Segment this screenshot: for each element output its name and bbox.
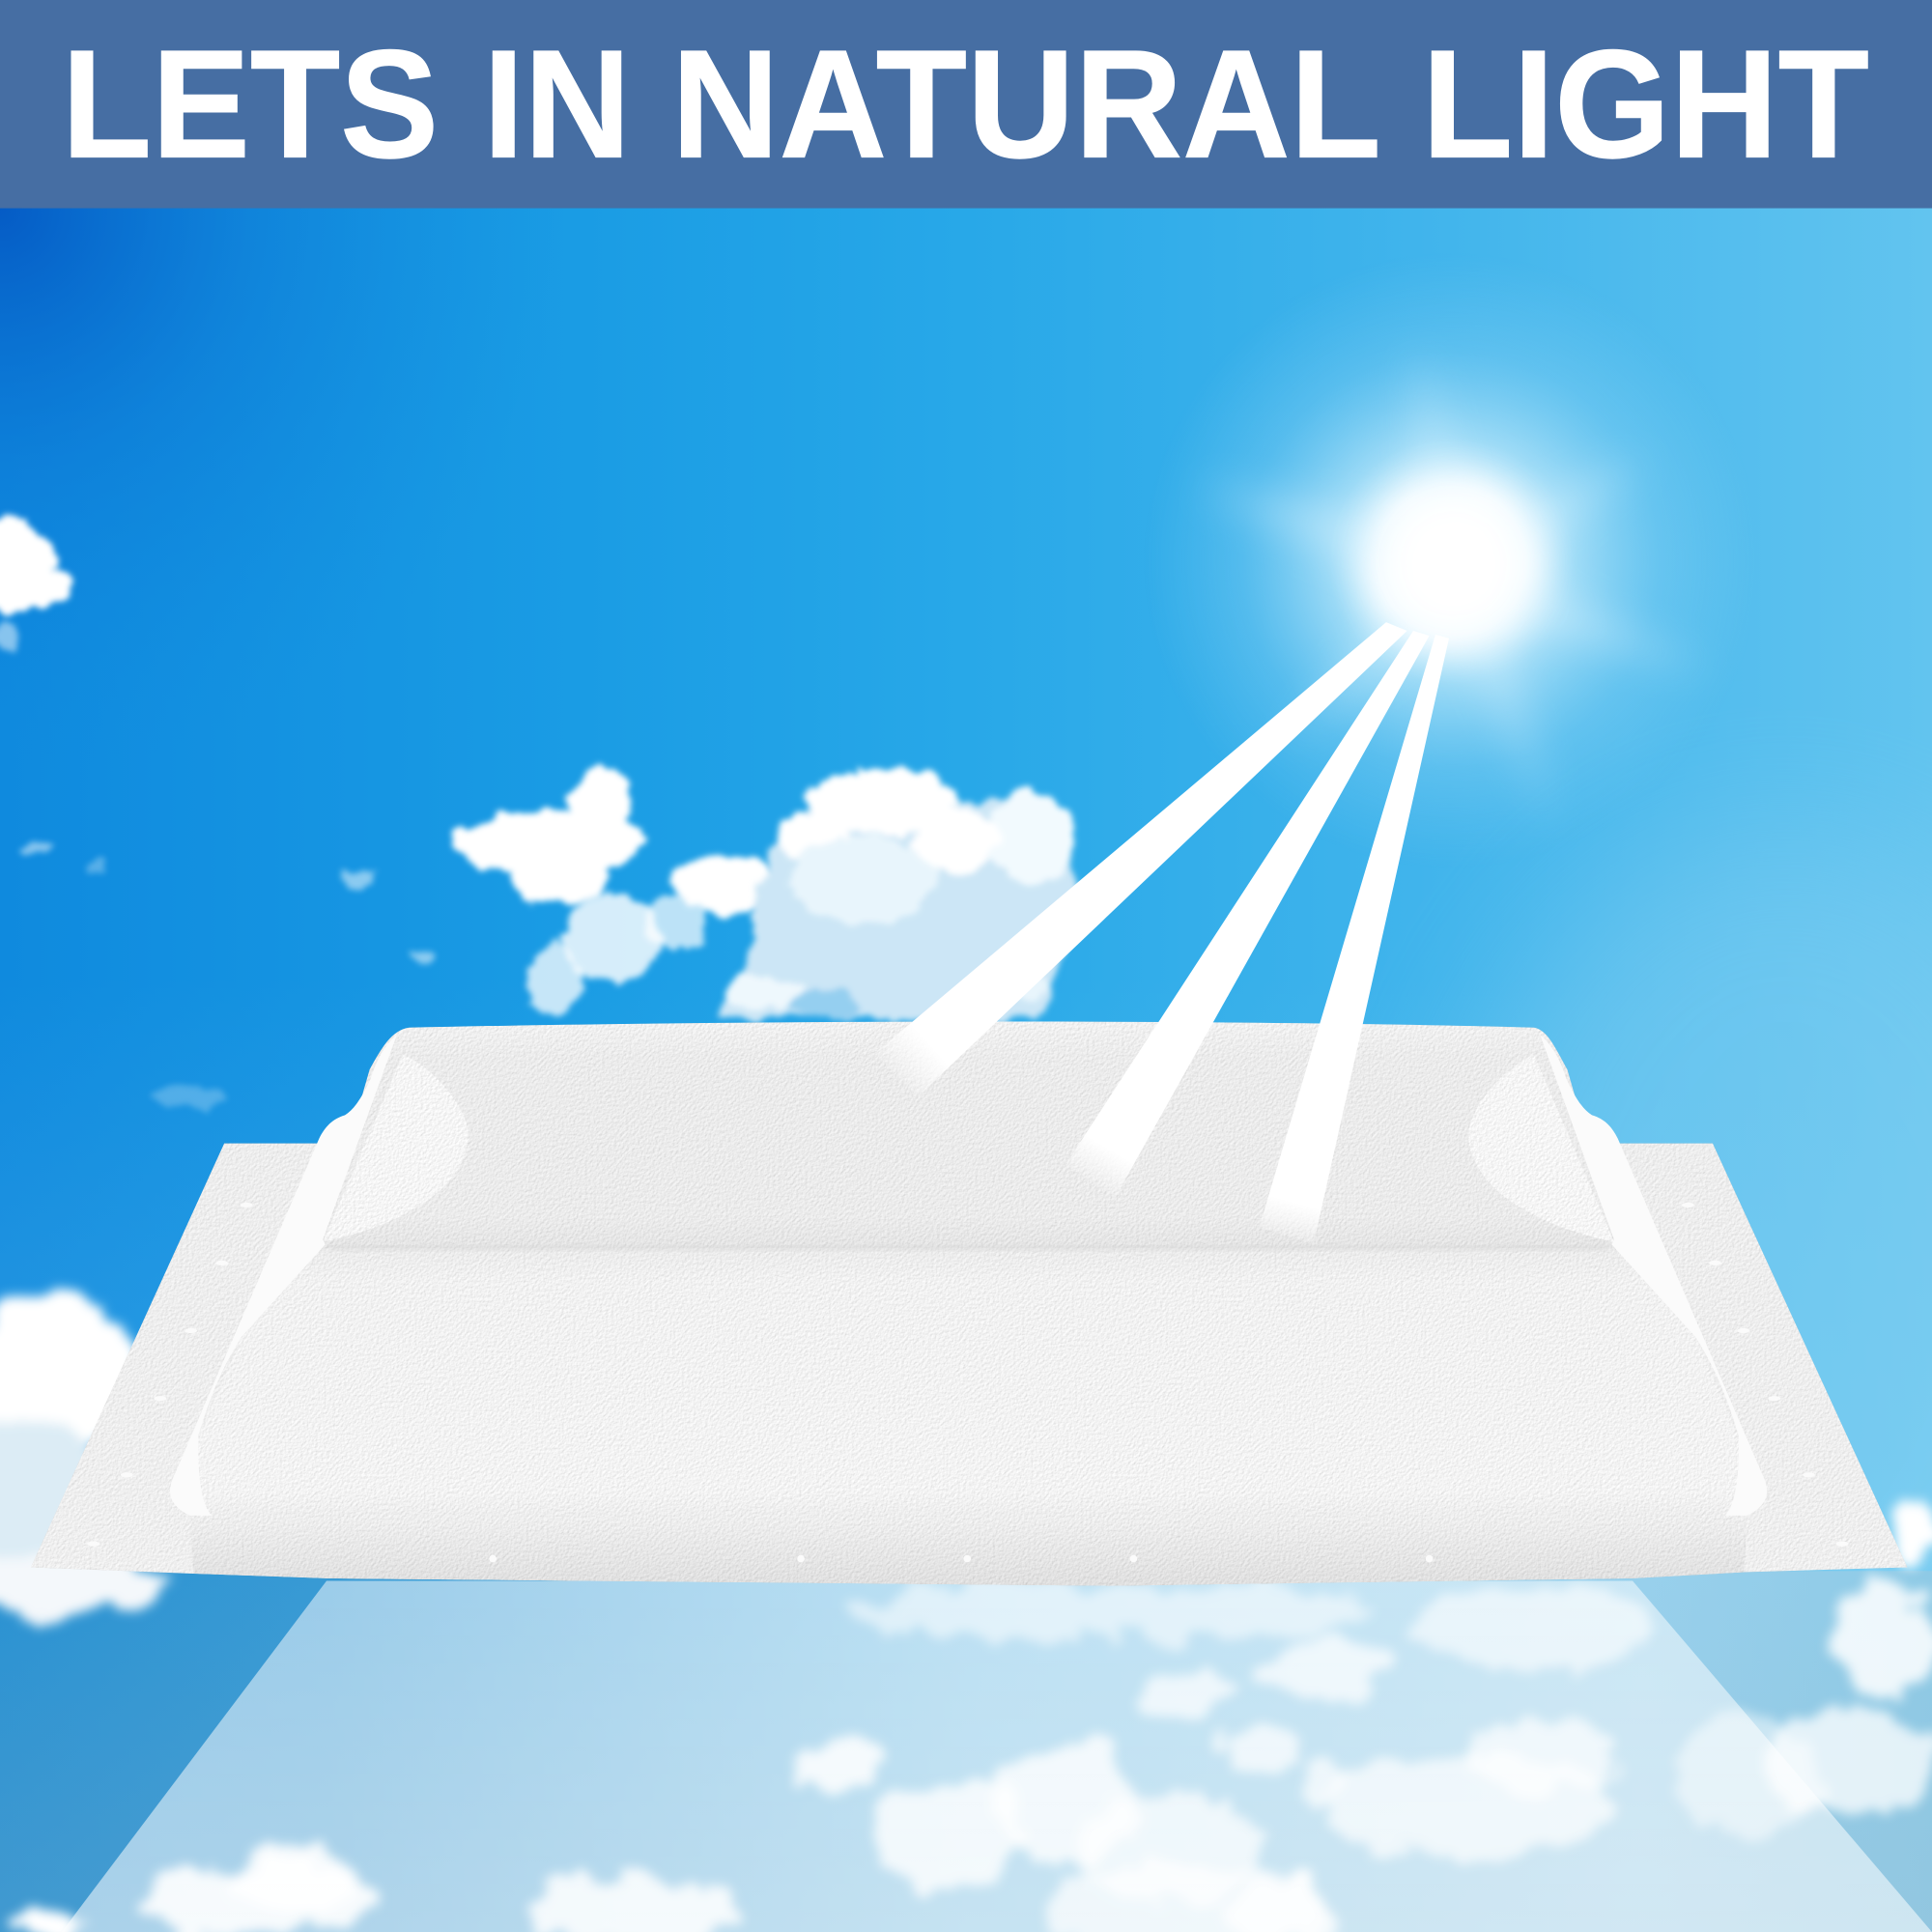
title text: IN [483,18,631,190]
title text: LIGHT [1422,18,1869,190]
ray 3 [1260,635,1449,1244]
light rays from sun to skylight [875,622,1449,1244]
skylight flange [31,1144,1907,1586]
ray 1 [875,622,1407,1096]
cloud: lower left edge [0,1297,162,1615]
cloud: central wispy puffs [452,766,783,1016]
clouds: lower sky band [14,1507,1932,1932]
title banner [0,0,1932,209]
ray 2 [1065,631,1430,1198]
skylight dome top face [318,1022,1619,1249]
small cloud wisps, left [19,841,434,1109]
title text [62,18,1869,190]
skylight screw holes [88,1203,1848,1562]
skylight product [31,1022,1907,1586]
title text: LETS [62,18,439,190]
lower sky beneath the skylight [0,1571,1932,1932]
sun with glow [1144,252,1759,868]
skylight front lip [189,1513,1747,1586]
cloud: central cumulus [715,766,1076,1020]
skylight right bright side strip [1540,1035,1767,1516]
skylight left corner lobe [323,1055,469,1242]
cloud: upper left edge [0,518,69,652]
skylight dome front face [185,1248,1752,1517]
skylight left bright side strip [170,1035,397,1516]
skylight right corner lobe [1468,1055,1614,1242]
translucent light beam under the skylight [62,1580,1932,1932]
skylight seam shadow [330,1246,1606,1251]
title text: NATURAL [671,18,1381,190]
